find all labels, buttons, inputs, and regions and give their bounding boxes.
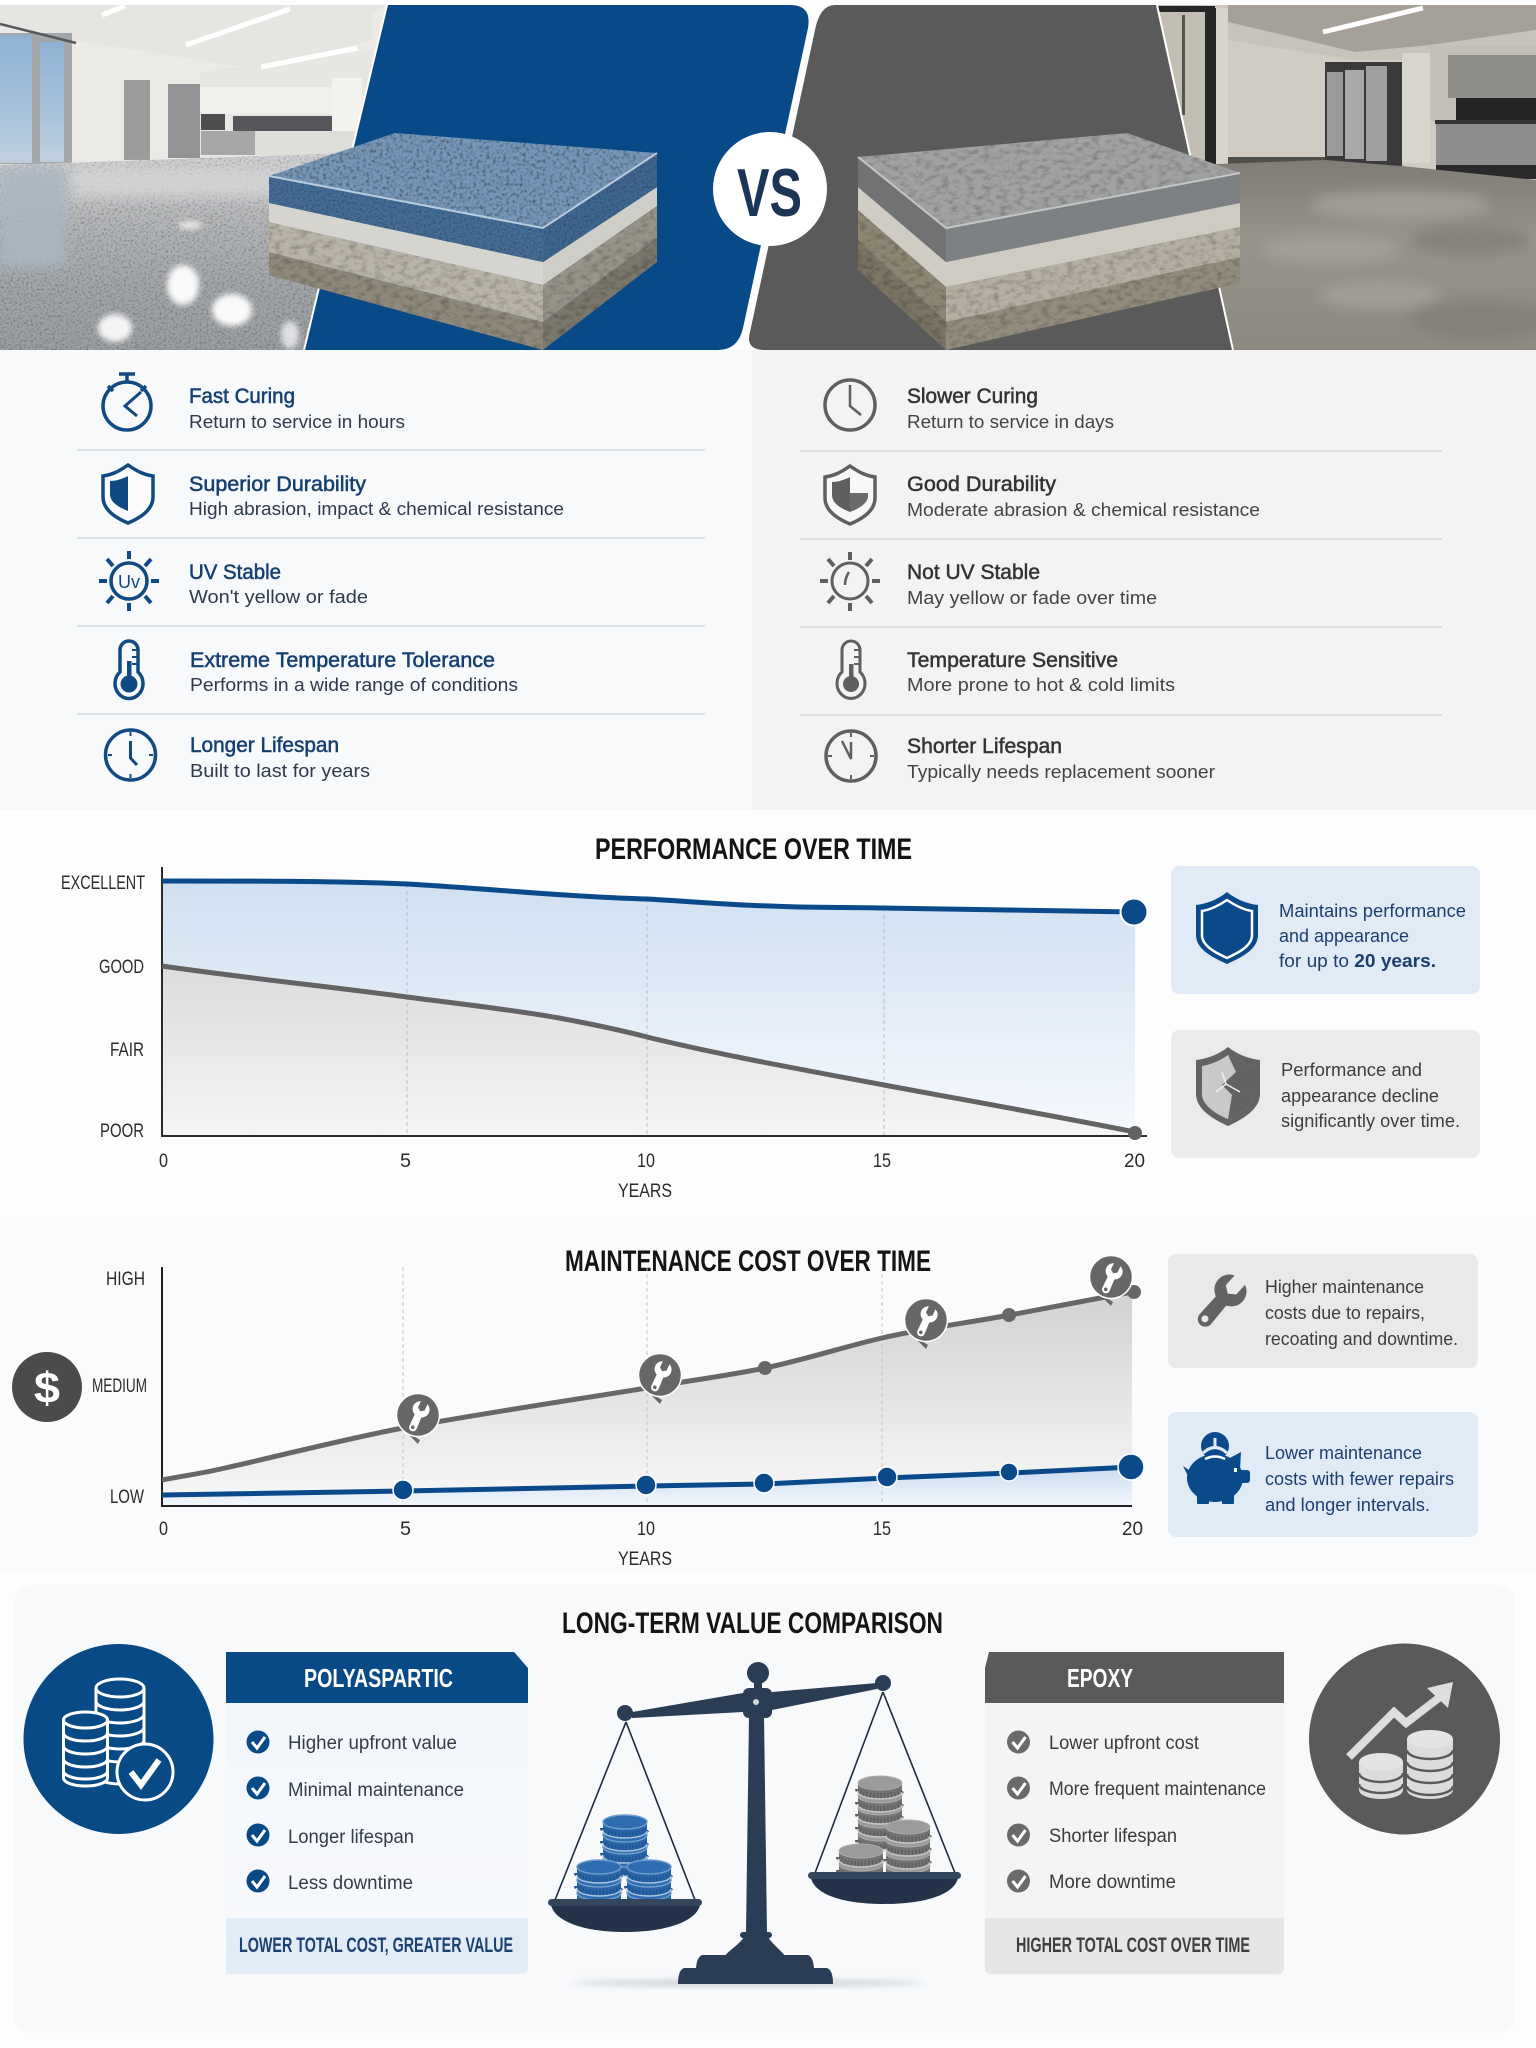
callout: polyaspartic performance — [1171, 866, 1480, 994]
card: epoxy: EPOXY — [1067, 1663, 1133, 1693]
feature: UV stable: UV Stable — [189, 561, 281, 584]
strings — [555, 1692, 955, 1900]
y axis labels: HIGH — [106, 1269, 145, 1290]
end point: epoxy — [1128, 1126, 1142, 1140]
layered slab: polyaspartic — [269, 133, 657, 350]
line chart: maintenance cost — [92, 1256, 1144, 1570]
check list: More downtime — [1049, 1872, 1176, 1893]
gray epoxy panel — [749, 5, 1233, 350]
icon: clock — [825, 380, 875, 430]
icon: shield — [103, 465, 153, 523]
check list: More frequent maintenance — [1049, 1779, 1266, 1800]
callout: epoxy performance: significantly over time. — [1281, 1110, 1460, 1131]
x axis labels: 20 — [1124, 1151, 1145, 1172]
summary band — [985, 1918, 1284, 1974]
feature: superior durability: High abrasion, impact & chemical resistance — [189, 498, 564, 519]
feature: temperature sensitive: More prone to hot & cold limits — [907, 674, 1175, 695]
icon: wrench — [1188, 1269, 1252, 1335]
card: polyaspartic: POLYASPARTIC — [304, 1663, 453, 1693]
callout: polyaspartic maintenance: Lower maintenance — [1265, 1442, 1422, 1463]
coins: polyaspartic pan — [577, 1815, 671, 1909]
feature: shorter lifespan: Shorter Lifespan — [907, 735, 1062, 758]
feature: shorter lifespan — [907, 735, 1215, 782]
icon: UV sun: Uv — [118, 572, 140, 592]
panel: polyaspartic benefits — [0, 350, 752, 810]
section: performance over time — [61, 833, 1480, 1202]
card header — [985, 1652, 1284, 1703]
icon: dollar coin: $ — [34, 1364, 60, 1413]
feature: good durability — [907, 473, 1260, 520]
photo edge lines — [304, 5, 1233, 350]
check list — [246, 1730, 464, 1894]
feature: not UV stable — [907, 561, 1157, 608]
card: epoxy — [985, 1652, 1284, 1974]
icon: clock — [106, 730, 156, 780]
section: maintenance cost over time — [0, 1218, 1536, 1573]
feature: slower curing: Slower Curing — [907, 385, 1038, 408]
x axis labels — [159, 1151, 1145, 1202]
icon: coins with check — [24, 1644, 214, 1834]
feature: longer lifespan — [190, 734, 370, 781]
line: polyaspartic — [162, 881, 1135, 912]
layered slab: epoxy — [858, 133, 1240, 350]
callout: polyaspartic performance: Maintains performance — [1279, 900, 1466, 921]
feature: superior durability — [189, 473, 564, 519]
check list: Shorter lifespan — [1049, 1826, 1177, 1847]
callout: epoxy performance: Performance and — [1281, 1059, 1422, 1080]
feature: slower curing: Return to service in days — [907, 411, 1114, 432]
feature: good durability: Good Durability — [907, 473, 1057, 496]
card: polyaspartic — [226, 1652, 528, 1974]
heading: PERFORMANCE OVER TIME — [595, 833, 912, 866]
icon: thermometer — [115, 641, 143, 698]
markers: polyaspartic — [393, 1454, 1144, 1500]
feature: good durability: Moderate abrasion & chemical resistance — [907, 499, 1260, 520]
callout: polyaspartic maintenance: costs with fewer repairs — [1265, 1468, 1454, 1489]
feature: temperature tolerance: Performs in a wide range of conditions — [190, 674, 518, 695]
feature: superior durability: Superior Durability — [189, 473, 366, 496]
end point: polyaspartic — [1120, 898, 1148, 926]
callout: polyaspartic maintenance: and longer intervals. — [1265, 1494, 1430, 1515]
y axis labels — [92, 1269, 147, 1508]
heading: MAINTENANCE COST OVER TIME — [565, 1245, 931, 1278]
coins: epoxy pan — [839, 1776, 930, 1882]
summary band — [226, 1918, 528, 1974]
icon: clock short hand — [826, 731, 876, 781]
icon: half shield — [825, 466, 875, 524]
feature: longer lifespan: Built to last for years — [190, 760, 370, 781]
photo: polyaspartic garage floor — [0, 5, 390, 350]
check list: Less downtime — [288, 1873, 413, 1894]
line chart: performance — [61, 867, 1148, 1202]
wrench pins — [396, 1256, 1132, 1444]
check list: Minimal maintenance — [288, 1780, 464, 1801]
y axis labels: MEDIUM — [92, 1376, 147, 1397]
check list — [1007, 1730, 1266, 1893]
callout: epoxy maintenance: Higher maintenance — [1265, 1276, 1424, 1297]
y axis labels: EXCELLENT — [61, 873, 145, 894]
x axis labels: YEARS — [618, 1181, 672, 1202]
line: epoxy — [162, 966, 1135, 1132]
markers: epoxy — [758, 1285, 1141, 1375]
section: long-term value comparison — [14, 1585, 1515, 2033]
feature: slower curing — [907, 385, 1114, 432]
line: polyaspartic cost — [162, 1467, 1132, 1495]
y axis labels — [61, 873, 145, 1142]
icon: stopwatch — [103, 374, 151, 430]
icon: thermometer — [837, 641, 865, 698]
check list: Higher upfront value — [288, 1733, 457, 1754]
callout: epoxy performance — [1171, 1030, 1480, 1158]
x axis labels: 5 — [400, 1519, 411, 1540]
y axis labels: FAIR — [110, 1040, 144, 1061]
feature: not UV stable: Not UV Stable — [907, 561, 1040, 584]
card header — [226, 1652, 528, 1703]
callout: polyaspartic maintenance — [1168, 1412, 1478, 1537]
x axis labels: 15 — [873, 1151, 891, 1172]
x axis labels: 0 — [159, 1519, 168, 1540]
icon: cracked shield — [1196, 1047, 1260, 1126]
icon: dollar coin — [12, 1352, 82, 1422]
stand — [617, 1662, 891, 1984]
icon: piggy bank — [1183, 1432, 1250, 1504]
photo: epoxy garage floor — [1150, 5, 1536, 350]
y axis labels: POOR — [100, 1121, 144, 1142]
feature: shorter lifespan: Typically needs replacement sooner — [907, 761, 1215, 782]
feature: UV stable: Won't yellow or fade — [189, 586, 368, 607]
VS badge — [713, 132, 827, 246]
feature: fast curing: Return to service in hours — [189, 411, 405, 432]
callout: polyaspartic performance: and appearance — [1279, 925, 1409, 946]
x axis labels: 0 — [159, 1151, 168, 1172]
x axis labels: YEARS — [618, 1549, 672, 1570]
feature: temperature tolerance — [190, 649, 518, 695]
feature: temperature tolerance: Extreme Temperature Tolerance — [190, 649, 495, 672]
feature: fast curing: Fast Curing — [189, 385, 295, 408]
feature: temperature sensitive — [907, 649, 1175, 695]
feature: longer lifespan: Longer Lifespan — [190, 734, 339, 757]
blue polyaspartic panel — [304, 5, 809, 350]
y axis labels: LOW — [110, 1487, 144, 1508]
x axis labels: 15 — [873, 1519, 891, 1540]
feature: temperature sensitive: Temperature Sensitive — [907, 649, 1118, 672]
icon: UV sun — [99, 551, 159, 611]
callout: epoxy maintenance: costs due to repairs, — [1265, 1302, 1425, 1323]
summary band: HIGHER TOTAL COST OVER TIME — [1016, 1934, 1250, 1957]
y axis labels: GOOD — [99, 957, 144, 978]
illustration: balance scale — [548, 1662, 961, 1987]
panel: epoxy drawbacks — [752, 350, 1536, 810]
callout: epoxy performance: appearance decline — [1281, 1085, 1439, 1106]
feature: fast curing — [189, 385, 405, 432]
hero comparison banner — [0, 5, 1536, 350]
callout: epoxy maintenance — [1168, 1254, 1478, 1368]
x axis labels: 10 — [637, 1151, 655, 1172]
icon: sun — [820, 552, 880, 611]
x axis labels: 5 — [400, 1151, 411, 1172]
check list: Lower upfront cost — [1049, 1733, 1200, 1754]
heading: LONG-TERM VALUE COMPARISON — [562, 1607, 943, 1640]
callout: polyaspartic performance: for up to 20 years. — [1279, 950, 1436, 971]
check list: Longer lifespan — [288, 1827, 414, 1848]
feature: UV stable — [189, 561, 368, 607]
pans — [548, 1872, 961, 1932]
VS badge: VS — [737, 155, 802, 231]
feature: not UV stable: May yellow or fade over time — [907, 587, 1157, 608]
x axis labels: 10 — [637, 1519, 655, 1540]
x axis labels — [159, 1519, 1143, 1570]
summary band: LOWER TOTAL COST, GREATER VALUE — [239, 1934, 513, 1957]
icon: shield — [1196, 892, 1258, 964]
line: epoxy cost — [162, 1292, 1132, 1480]
x axis labels: 20 — [1122, 1519, 1143, 1540]
callout: epoxy maintenance: recoating and downtime. — [1265, 1328, 1458, 1349]
icon: coins with rising arrow — [1309, 1644, 1500, 1834]
